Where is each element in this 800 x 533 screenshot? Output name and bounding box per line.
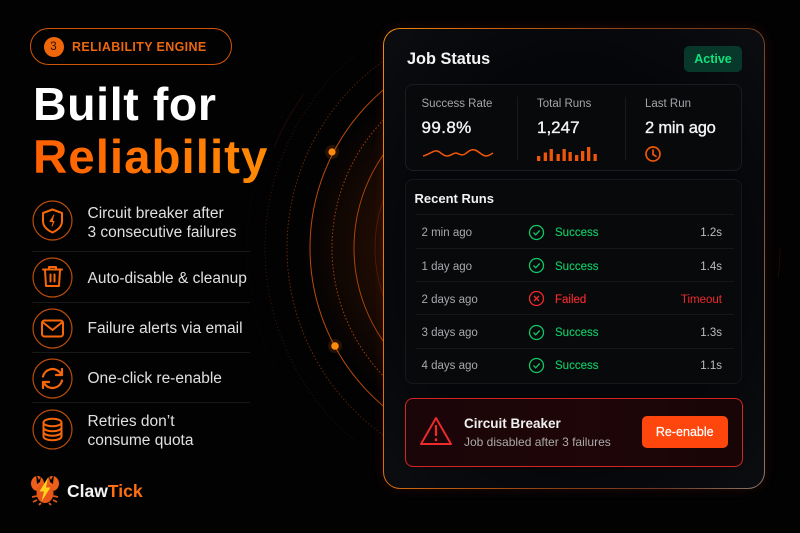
row 1: 1.2s [700, 227, 722, 239]
wordmark: ClawTick [67, 481, 143, 501]
feature: circuit breaker: Circuit breaker after [88, 205, 224, 222]
value: 1,247 [537, 118, 580, 137]
row 5: Success [555, 360, 598, 372]
icon: trash [32, 257, 73, 298]
feature: retries [88, 413, 194, 449]
background rings [246, 30, 780, 460]
label: Total Runs [537, 98, 591, 110]
panel: job status [383, 28, 765, 489]
feature: circuit breaker [88, 205, 237, 241]
title [33, 78, 268, 184]
bar chart [537, 147, 597, 161]
row 3: Timeout [681, 294, 722, 306]
title line 2: Reliability [33, 131, 268, 184]
icon: lobster with bolt [31, 476, 59, 506]
alert message: Job disabled after 3 failures [464, 435, 611, 449]
row 2 [422, 258, 722, 274]
label: Success Rate [422, 98, 492, 110]
row 2: 1.4s [700, 260, 722, 272]
stat: last run [645, 98, 716, 162]
row 1: Success [555, 227, 598, 239]
row 3: Failed [555, 294, 586, 306]
row 4: 3 days ago [422, 326, 478, 338]
label: Last Run [645, 98, 691, 110]
re-enable button: Re-enable [656, 425, 714, 439]
icon: refresh [32, 358, 73, 399]
panel heading: Recent Runs [414, 190, 494, 206]
recent runs panel [405, 179, 742, 384]
sparkline [422, 149, 494, 157]
row 4 [422, 324, 722, 340]
row 2: Success [555, 260, 598, 272]
stat: success rate [422, 98, 494, 157]
value: 2 min ago [645, 119, 716, 137]
stat: total runs [537, 98, 597, 161]
status pill: Active [694, 52, 732, 66]
alert title: Circuit Breaker [464, 416, 561, 431]
stats panel [405, 84, 742, 171]
row 4: 1.3s [700, 326, 722, 338]
row 5: 1.1s [700, 360, 722, 372]
title line 1: Built for [33, 78, 217, 130]
icon: database [32, 409, 73, 450]
feature: circuit breaker: 3 consecutive failures [88, 224, 237, 241]
feature: auto-disable: Auto-disable & cleanup [88, 270, 247, 287]
feature: retries: Retries don’t [88, 413, 175, 430]
row 1: 2 min ago [422, 227, 472, 239]
row 5: 4 days ago [422, 360, 478, 372]
alert: circuit breaker [405, 398, 743, 467]
badge: reliability engine [30, 28, 232, 65]
feature: retries: consume quota [88, 432, 194, 449]
re-enable button [642, 416, 728, 448]
ring node: upper [325, 145, 339, 159]
logo [31, 476, 143, 506]
icon: shield with bolt [32, 200, 73, 241]
status pill [684, 46, 742, 72]
value: 99.8% [422, 118, 472, 137]
badge label: RELIABILITY ENGINE [72, 40, 207, 54]
icon: warning triangle [420, 417, 452, 445]
row 2: 1 day ago [422, 260, 472, 272]
badge number [44, 36, 64, 56]
row 4: Success [555, 326, 598, 338]
panel heading: Job Status [407, 50, 490, 68]
row 5 [422, 358, 722, 374]
row 3 [422, 290, 722, 306]
feature: failure alerts: Failure alerts via email [88, 320, 243, 337]
ring node: lower [328, 339, 342, 353]
row 1 [422, 224, 722, 240]
feature: re-enable: One-click re-enable [88, 370, 222, 387]
row 3: 2 days ago [422, 294, 478, 306]
badge number: 3 [50, 40, 57, 52]
icon: envelope [32, 308, 73, 349]
icon: clock [645, 146, 661, 162]
